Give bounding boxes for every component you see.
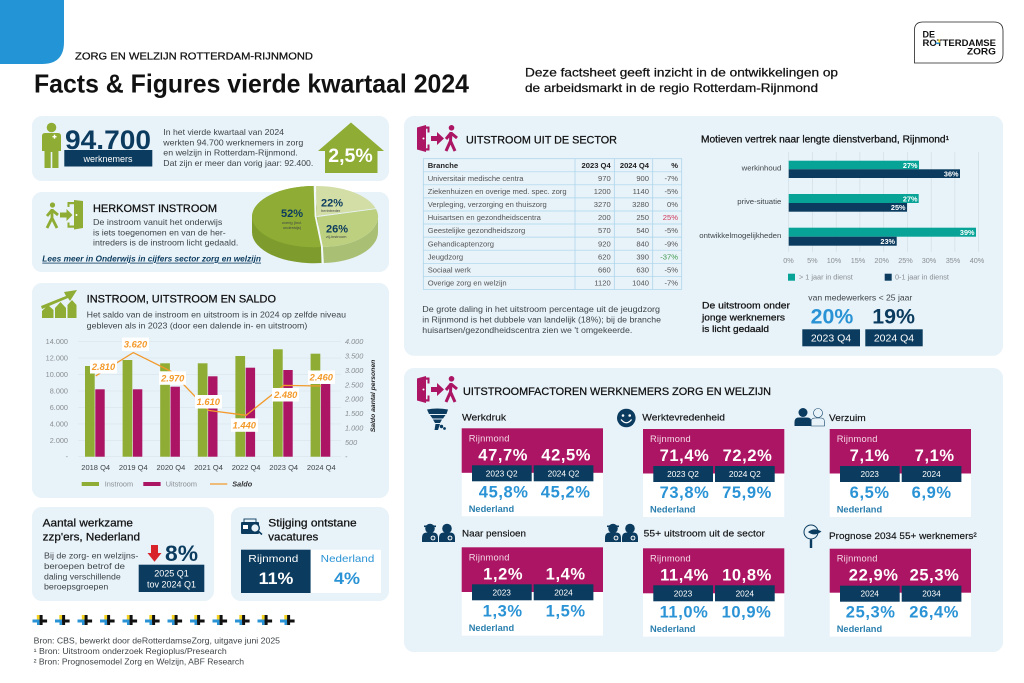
table — [423, 159, 682, 289]
stat 2024 Q4 — [865, 305, 923, 346]
card: naar pensioen — [462, 547, 603, 636]
blue corner tab — [0, 0, 64, 64]
table rows: Huisartsen en gezondheidscentra — [428, 213, 542, 222]
saldo labels: 2.970 — [160, 373, 185, 383]
card: prognose: Nederland — [837, 624, 882, 634]
icon: sick leave — [794, 408, 824, 426]
right axis: 500 — [345, 438, 357, 447]
description: beroepen betrof de — [44, 562, 126, 571]
period label: 2025 Q1 — [154, 568, 189, 578]
rijnmond stat — [241, 550, 311, 593]
icon: older workers — [605, 524, 638, 542]
heading: HERKOMST INSTROOM — [93, 203, 217, 215]
icon: care worker — [42, 123, 61, 168]
x axis: 10% — [827, 256, 842, 265]
bars — [789, 161, 976, 246]
x axis: 20% — [874, 256, 890, 265]
intro text: Deze factsheet geeft inzicht in de ontwikkelingen op — [525, 66, 838, 80]
card: werktevredenheid: 72,2% — [723, 447, 772, 465]
panel: werknemers — [32, 116, 389, 181]
werknemers label — [64, 150, 152, 166]
icon: entering door — [47, 200, 83, 230]
bar values: 23% — [880, 237, 896, 246]
x axis — [783, 256, 985, 265]
description: werkten 94.700 werknemers in zorg — [162, 137, 304, 147]
x axis labels: 2019 Q4 — [119, 463, 148, 472]
heading: zzp'ers, Nederland — [43, 531, 140, 543]
description — [162, 127, 313, 168]
table rows — [428, 174, 678, 288]
rijnmond stat: 11% — [259, 569, 293, 588]
x axis: 40% — [970, 256, 985, 265]
icon: exit — [417, 376, 457, 403]
table rows: 570 — [598, 226, 611, 235]
table rows: Ziekenhuizen en overige med. spec. zorg — [428, 187, 567, 196]
right axis: 1.000 — [345, 424, 363, 432]
table header: % — [671, 161, 678, 170]
pie labels: overig (incl. — [282, 220, 302, 225]
table rows: Verpleging, verzorging en thuiszorg — [428, 200, 547, 209]
saldo labels — [90, 338, 335, 432]
heading: Aantal werkzame — [43, 518, 133, 530]
pie labels: 52% — [281, 208, 303, 220]
heading: 55+ uitstroom: 55+ uitstroom uit de sector — [644, 529, 766, 540]
heading: prognose: Prognose 2034 55+ werknemers² — [829, 531, 978, 542]
pie labels — [281, 198, 348, 239]
intro text — [525, 66, 838, 95]
description: Bij de zorg- en welzijns- — [44, 552, 139, 561]
description: In het vierde kwartaal van 2024 — [163, 127, 284, 137]
saldo labels: 2.480 — [273, 390, 298, 400]
pie chart — [252, 185, 378, 264]
card: prognose: 2024 — [860, 589, 879, 599]
pie labels: onderwijs) — [283, 225, 302, 230]
right axis: 4.000 — [345, 337, 363, 346]
card: verzuim: 6,5% — [850, 484, 890, 502]
left axis: 10.000 — [46, 370, 68, 379]
saldo labels: 3.620 — [124, 340, 148, 350]
right axis: 3.500 — [345, 352, 363, 361]
x axis: 15% — [851, 256, 866, 265]
table rows: Gehandicaptenzorg — [428, 239, 494, 248]
card: verzuim: 2024 — [922, 469, 941, 479]
rijnmond stat: Rijnmond — [248, 553, 298, 565]
card: werkdruk: 45,2% — [541, 483, 591, 501]
young workers statement: is licht gedaald — [702, 324, 769, 335]
table rows: 540 — [636, 226, 649, 235]
table rows: 630 — [636, 265, 649, 274]
table rows: -9% — [664, 239, 678, 248]
card: naar pensioen: 1,4% — [546, 565, 586, 583]
table rows: Universitair medische centra — [428, 174, 524, 183]
werknemers label: werknemers — [82, 154, 133, 164]
icon: smiley — [617, 409, 636, 427]
bar values: 27% — [903, 161, 918, 170]
card: werktevredenheid: 2024 Q2 — [729, 469, 761, 479]
right axis: 2.000 — [344, 395, 363, 404]
saldo labels: 2.810 — [91, 362, 116, 372]
card: naar pensioen: Rijnmond — [469, 552, 510, 562]
left axis: 12.000 — [46, 354, 68, 363]
table rows: 920 — [598, 239, 611, 248]
card: naar pensioen: Nederland — [469, 623, 514, 633]
table header: 2024 Q4 — [620, 161, 650, 170]
card: verzuim: Nederland — [837, 504, 882, 514]
left axis — [46, 337, 69, 461]
card: 55+ uitstroom: 10,8% — [722, 566, 772, 584]
card: werktevredenheid: Nederland — [650, 504, 696, 514]
logo marks row — [32, 615, 295, 625]
card: verzuim: 6,9% — [912, 484, 952, 502]
table rows: Overige zorg en welzijn — [428, 278, 507, 288]
description: daling verschillende — [44, 572, 121, 581]
table rows: 1140 — [633, 187, 649, 196]
logo: ROTTERDAMSE — [922, 38, 996, 49]
icon: house with percentage: 2,5% — [328, 145, 373, 167]
legend — [788, 273, 949, 282]
heading: verzuim: Verzuim — [829, 413, 866, 424]
card: verzuim: 2023 — [860, 469, 879, 479]
title: Facts & Figures vierde kwartaal 2024 — [34, 68, 470, 98]
legend: Uitstroom — [166, 480, 197, 488]
pie labels: 22% — [321, 198, 343, 210]
x axis: 30% — [922, 256, 937, 265]
subtitle: ZORG EN WELZIJN ROTTERDAM-RIJNMOND — [75, 50, 313, 62]
categories — [699, 164, 781, 240]
x axis: 35% — [946, 256, 961, 265]
card: naar pensioen: 2024 — [554, 587, 573, 597]
panel: vacatures — [231, 507, 389, 601]
pie labels: 26% — [326, 224, 348, 236]
table note: huisartsen/gezondheidscentra zien we 't omgekeerde. — [422, 325, 632, 335]
left axis: 8.000 — [50, 386, 68, 396]
card: 55+ uitstroom: 2024 — [736, 588, 754, 598]
panel: uitstroom uit de sector — [404, 116, 1003, 356]
description — [44, 552, 139, 592]
table rows: Jeugdzorg — [428, 252, 463, 261]
table rows: 0% — [667, 200, 678, 209]
heading: Stijging ontstane — [268, 518, 357, 530]
card: prognose: 25,3% — [910, 567, 959, 585]
bar chart: motieven — [699, 152, 985, 282]
description — [93, 217, 238, 248]
table header: Branche — [428, 161, 458, 170]
8 percent: 8% — [165, 541, 198, 566]
right axis: 1.500 — [345, 409, 363, 418]
table rows: 3280 — [632, 200, 649, 209]
big number: 94.700 — [65, 125, 151, 155]
panel: instroom uitstroom saldo — [32, 283, 389, 498]
x axis: 5% — [807, 256, 818, 265]
card: 55+ uitstroom: 11,0% — [660, 603, 708, 621]
table rows: 1120 — [594, 278, 611, 288]
intro text: de arbeidsmarkt in de regio Rotterdam-Rijnmond — [525, 81, 818, 95]
young workers caption: van medewerkers < 25 jaar — [808, 293, 912, 303]
card: werkdruk: Nederland — [469, 504, 514, 514]
table rows: 620 — [598, 252, 611, 261]
nederland stat: 4% — [334, 569, 360, 588]
categories: prive-situatie — [737, 197, 781, 206]
table rows: -37% — [660, 252, 678, 261]
table rows: 25% — [663, 213, 678, 222]
card: naar pensioen: 2023 — [492, 587, 511, 597]
saldo labels: 1.440 — [233, 420, 257, 430]
saldo labels: 1.610 — [197, 397, 221, 407]
table rows: -5% — [664, 187, 678, 196]
x axis labels: 2020 Q4 — [157, 463, 185, 472]
stat 2023 Q4: 20% — [811, 305, 854, 328]
card: werkdruk: 2024 Q2 — [548, 468, 580, 478]
card: prognose: 22,9% — [849, 567, 899, 585]
card: prognose — [830, 549, 971, 637]
card: prognose: Rijnmond — [837, 554, 878, 564]
left axis: - — [66, 452, 69, 461]
sources — [34, 636, 281, 666]
young workers statement: jonge werknemers — [701, 312, 785, 323]
card: werktevredenheid: 73,8% — [660, 484, 709, 502]
heading: UITSTROOM UIT DE SECTOR — [466, 134, 617, 146]
card: verzuim — [830, 429, 971, 517]
icon: red down arrow — [148, 545, 162, 562]
nederland stat: Nederland — [321, 553, 374, 565]
table rows: 1200 — [594, 187, 611, 196]
card: 55+ uitstroom: Nederland — [650, 624, 696, 634]
bar values: 36% — [944, 170, 959, 179]
table rows: 390 — [636, 252, 649, 261]
description — [87, 310, 346, 330]
table rows: 250 — [636, 213, 649, 222]
instroom bars — [85, 349, 320, 457]
stat 2024 Q4: 2024 Q4 — [874, 333, 914, 345]
right axis: 3.000 — [345, 366, 363, 375]
description: Het saldo van de instroom en uitstroom is in 2024 op zelfde niveau — [87, 310, 346, 320]
young workers statement — [701, 301, 791, 335]
table note: in Rijnmond is het dubbele van landelijk (18%); bij de branche — [422, 315, 661, 325]
heading: naar pensioen: Naar pensioen — [462, 529, 526, 540]
description: Dat zijn er meer dan vorig jaar: 92.400. — [163, 158, 313, 168]
pie labels: herintreder — [321, 208, 341, 213]
x axis labels: 2018 Q4 — [81, 463, 110, 472]
left axis: 14.000 — [46, 337, 68, 346]
table rows: -5% — [664, 265, 678, 274]
x axis: 0% — [783, 256, 794, 265]
card: werktevredenheid — [643, 429, 784, 517]
bar values: 39% — [960, 228, 975, 237]
categories: werkinhoud — [741, 164, 781, 172]
legend: 0-1 jaar in dienst — [895, 273, 949, 282]
x axis labels: 2024 Q4 — [307, 463, 336, 472]
panel: zzp — [32, 507, 214, 601]
card: 55+ uitstroom — [643, 548, 784, 637]
table note: De grote daling in het uitstroom percentage uit de jeugdzorg — [422, 304, 660, 314]
heading: vacatures — [268, 531, 319, 543]
card: 55+ uitstroom: 2023 — [674, 588, 693, 598]
card: werkdruk — [462, 428, 603, 516]
sources: ¹ Bron: Uitstroom onderzoek Regioplus/Presearch — [34, 647, 227, 656]
left axis: 4.000 — [50, 419, 68, 428]
card: werkdruk: Rijnmond — [469, 433, 510, 443]
uitstroom bars — [95, 368, 330, 457]
table rows: 3270 — [594, 200, 611, 209]
table rows: Geestelijke gezondheidszorg — [428, 226, 525, 235]
x axis labels: 2023 Q4 — [269, 463, 298, 472]
heading: werkdruk: Werkdruk — [462, 413, 506, 424]
card: werktevredenheid: 71,4% — [660, 447, 709, 465]
chart heading: Motieven vertrek naar lengte dienstverband, Rijnmond¹ — [701, 135, 950, 146]
table rows: 840 — [636, 239, 649, 248]
right axis — [344, 337, 377, 461]
legend: > 1 jaar in dienst — [799, 273, 853, 282]
panel: herkomst instroom — [32, 185, 389, 272]
period label: tov 2024 Q1 — [147, 580, 196, 590]
card: 55+ uitstroom: Rijnmond — [650, 553, 691, 563]
bar values — [880, 161, 975, 246]
table rows: -7% — [664, 174, 678, 183]
legend: Instroom — [105, 480, 133, 488]
table note — [422, 304, 661, 335]
legend: Saldo — [232, 480, 253, 488]
card: werkdruk: 42,5% — [541, 446, 591, 464]
heading: INSTROOM, UITSTROOM EN SALDO — [87, 294, 276, 306]
right axis: - — [345, 452, 348, 461]
table header — [428, 161, 678, 170]
stat 2024 Q4: 19% — [872, 305, 915, 328]
sources: ² Bron: Prognosemodel Zorg en Welzijn, ABF Research — [34, 657, 244, 666]
card: verzuim: 7,1% — [915, 447, 955, 465]
description: en welzijn in Rotterdam-Rijnmond. — [163, 148, 298, 158]
table rows: -7% — [664, 278, 678, 288]
young workers statement: De uitstroom onder — [702, 301, 791, 312]
card: prognose: 25,3% — [846, 604, 896, 622]
icon: house with percentage — [318, 122, 384, 173]
saldo line — [96, 353, 321, 415]
stat 2023 Q4 — [802, 305, 860, 346]
card: werktevredenheid: 2023 Q2 — [667, 469, 699, 479]
combo chart — [46, 337, 377, 488]
table rows: 900 — [636, 174, 649, 183]
description: gebleven als in 2023 (door een dalende in- en uitstroom) — [87, 320, 308, 330]
table rows: Sociaal werk — [428, 265, 471, 274]
heading — [43, 518, 140, 543]
card: werkdruk: 45,8% — [479, 483, 529, 501]
categories: ontwikkelmogelijkheden — [699, 231, 781, 240]
x axis labels: 2022 Q4 — [232, 463, 260, 472]
icon: growth chart — [41, 290, 77, 318]
sources: Bron: CBS, bewerkt door deRotterdamseZorg, uitgave juni 2025 — [34, 636, 281, 645]
period label — [139, 565, 204, 592]
legend — [82, 480, 253, 488]
description: is iets toegenomen en van de her- — [93, 227, 226, 237]
description: De instroom vanuit het onderwijs — [93, 217, 222, 227]
card: verzuim: 7,1% — [850, 447, 890, 465]
left axis: 2.000 — [50, 436, 68, 445]
icon: vacancy search — [241, 519, 262, 534]
left axis: 6.000 — [50, 403, 68, 412]
heading — [268, 518, 357, 543]
card: werktevredenheid: Rijnmond — [650, 434, 691, 444]
right axis: Saldo aantal personen — [370, 360, 377, 432]
stat 2023 Q4: 2023 Q4 — [811, 333, 851, 345]
card: prognose: 2034 — [922, 589, 941, 599]
nederland stat — [311, 550, 381, 593]
table header: 2023 Q4 — [582, 161, 611, 170]
x axis labels — [81, 463, 336, 472]
link: Lees meer in Onderwijs in cijfers sector zorg en welzijn — [42, 255, 261, 264]
description: intreders is de instroom licht gedaald. — [93, 238, 238, 248]
icon: forecast magnifier — [804, 525, 822, 548]
card: naar pensioen: 1,5% — [546, 602, 586, 620]
saldo labels: 2.460 — [309, 372, 334, 382]
table rows: 200 — [598, 213, 611, 222]
card: werkdruk: 2023 Q2 — [486, 468, 518, 478]
panel: uitstroomfactoren — [404, 368, 1003, 652]
x axis: 25% — [898, 256, 913, 265]
pie labels: zij-instroom — [326, 234, 347, 239]
icon: exit — [417, 125, 457, 152]
card: prognose: 26,4% — [909, 604, 959, 622]
card: naar pensioen: 1,3% — [483, 602, 523, 620]
icon: tornado — [427, 408, 448, 430]
x axis labels: 2021 Q4 — [194, 463, 223, 472]
logo: DE — [922, 29, 935, 40]
card: werkdruk: 47,7% — [478, 446, 528, 464]
card: naar pensioen: 1,2% — [483, 565, 523, 583]
right axis: 2.500 — [344, 380, 363, 389]
bar values: 25% — [891, 203, 906, 212]
card: 55+ uitstroom: 10,9% — [722, 603, 771, 621]
heading: werktevredenheid: Werktevredenheid — [642, 413, 725, 424]
description: beroepsgroepen — [44, 583, 108, 592]
table rows: 970 — [598, 174, 611, 183]
card: verzuim: Rijnmond — [837, 434, 878, 444]
icon: retired people — [422, 524, 455, 542]
card: 55+ uitstroom: 11,4% — [660, 566, 709, 584]
card: werktevredenheid: 75,9% — [722, 484, 772, 502]
bar values: 27% — [903, 194, 918, 203]
logo: ZORG — [967, 46, 996, 58]
table rows: 660 — [598, 265, 611, 274]
table rows: -5% — [664, 226, 678, 235]
logo — [914, 22, 1003, 63]
table rows: 1040 — [632, 278, 649, 288]
heading: UITSTROOMFACTOREN WERKNEMERS ZORG EN WELZIJN — [463, 386, 771, 398]
